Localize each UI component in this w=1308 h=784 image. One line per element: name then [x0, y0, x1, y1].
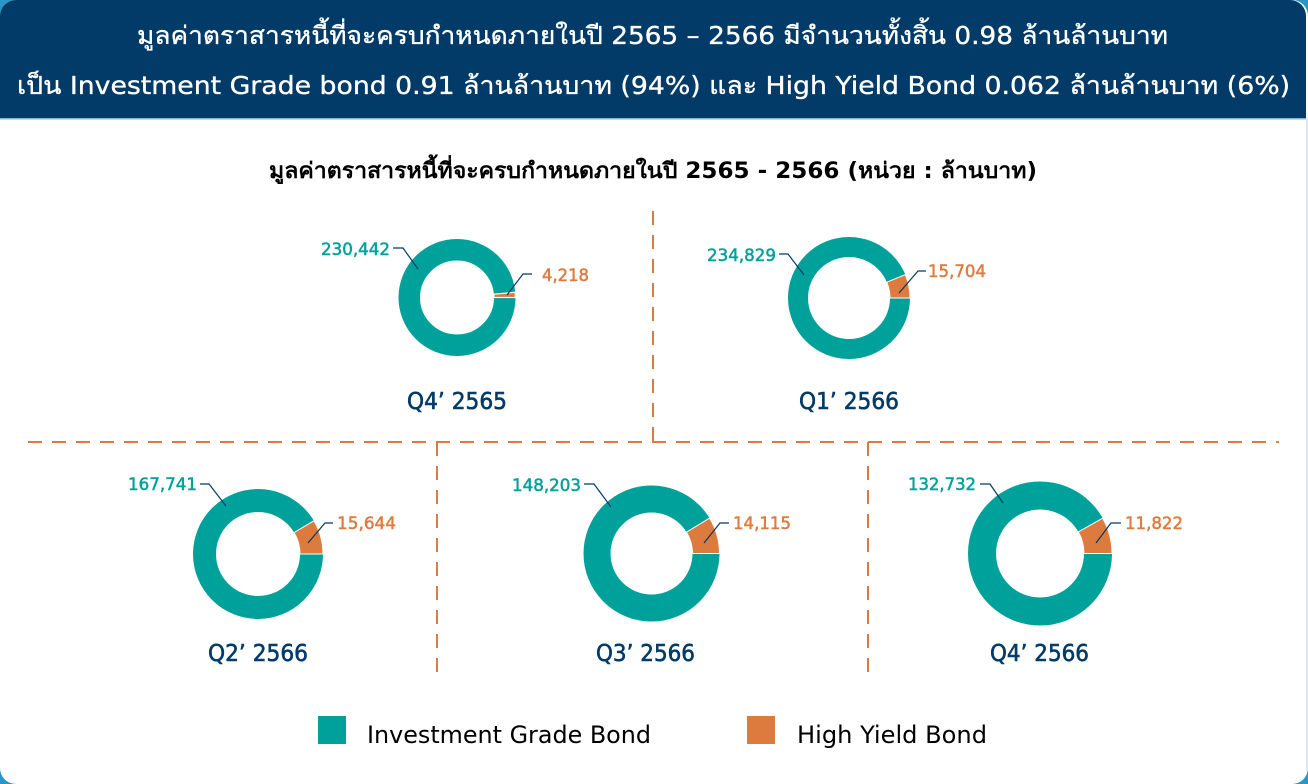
donut chart: Q1' 2566: Q1’ 2566: [799, 389, 899, 415]
legend item: High Yield Bond: High Yield Bond: [797, 721, 987, 749]
donut chart: Q4' 2566: 132,732: [908, 475, 976, 495]
donut chart: Q4' 2565: [321, 240, 589, 415]
donut chart: Q3' 2566: 148,203: [512, 476, 581, 496]
donut chart: Q3' 2566: [512, 476, 791, 667]
donut chart: Q4' 2566: Q4’ 2566: [990, 641, 1089, 667]
donut chart: Q3' 2566: 14,115: [733, 514, 791, 534]
donut chart: Q4' 2566: [908, 475, 1183, 667]
donut chart: Q1' 2566: 15,704: [928, 262, 986, 282]
donut chart: Q1' 2566: 234,829: [707, 246, 776, 266]
title line 1: มูลค่าตราสารหนี้ที่จะครบกำหนดภายในปี 2565 – 2566 มีจำนวนทั้งสิ้น 0.98 ล้านล้านบาท: [137, 17, 1168, 51]
legend item: High Yield Bond: [747, 716, 987, 749]
legend: [318, 716, 987, 749]
donut chart: Q4' 2565: 230,442: [321, 240, 390, 260]
donut chart: Q1' 2566: [707, 246, 986, 415]
donut chart: Q2' 2566: 167,741: [128, 475, 197, 495]
donut chart: Q3' 2566: Q3’ 2566: [596, 641, 695, 667]
donut chart: Q4' 2565: Q4’ 2565: [407, 389, 507, 415]
header banner: [0, 0, 1306, 120]
donut chart: Q2' 2566: Q2’ 2566: [208, 641, 308, 667]
legend item: Investment Grade Bond: Investment Grade Bond: [367, 721, 651, 749]
donut chart: Q4' 2566: 11,822: [1125, 514, 1183, 534]
donut chart: Q2' 2566: 15,644: [337, 514, 396, 534]
donut chart: Q4' 2565: 4,218: [542, 266, 589, 286]
title line 2: เป็น Investment Grade bond 0.91 ล้านล้านบาท (94%) และ High Yield Bond 0.062 ล้านล้านบาท (6%): [17, 70, 1290, 100]
donut chart: Q2' 2566: [128, 475, 396, 667]
chart heading: มูลค่าตราสารหนี้ที่จะครบกำหนดภายในปี 2565 - 2566 (หน่วย : ล้านบาท): [269, 154, 1037, 185]
